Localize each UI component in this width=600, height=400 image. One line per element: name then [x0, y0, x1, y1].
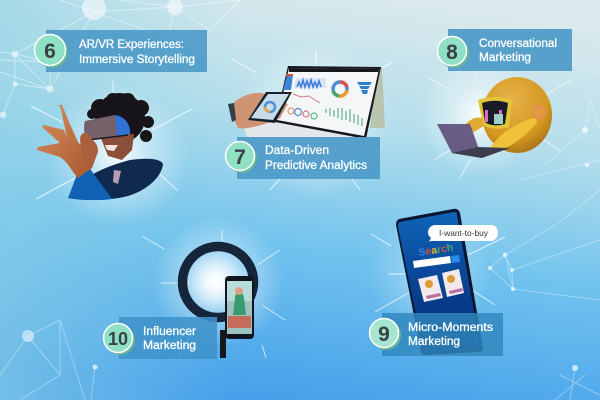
number badge 6: [34, 34, 68, 68]
item 9 label: Marketing: [408, 336, 460, 348]
item 7 label: Predictive Analytics: [265, 160, 367, 172]
face: [100, 134, 134, 160]
number badge 9: 9: [378, 323, 390, 346]
item 10 label: Marketing: [143, 340, 196, 352]
hair: [87, 93, 154, 143]
item 8 illustration: robot with laptop: [418, 53, 571, 178]
item 10 label: Influencer: [143, 326, 196, 338]
number badge 7: [226, 142, 257, 173]
item 6 label: AR/VR Experiences:: [79, 39, 184, 51]
item 10 illustration: ring light with phone: [142, 216, 285, 358]
item 8 label: Conversational: [479, 38, 557, 50]
hinge and keyboard: [370, 67, 385, 128]
screen: [275, 66, 381, 139]
speech bubble: I-want-to-buy: [439, 228, 489, 238]
network decoration: top: [0, 0, 600, 125]
item 8 label: [438, 29, 572, 71]
hand holding phone: [232, 93, 288, 128]
number badge 7: 7: [234, 146, 246, 169]
item 8 label: Marketing: [479, 52, 531, 64]
item 6 label: Immersive Storytelling: [79, 54, 195, 66]
item 6 label: [34, 30, 207, 72]
donut chart: [333, 82, 347, 96]
product cards: [418, 275, 443, 302]
body: [68, 159, 163, 200]
headset: [84, 115, 117, 140]
search word: Search: [418, 242, 454, 259]
item 10 label: [104, 317, 217, 359]
item 9 label: Micro-Moments: [408, 322, 493, 334]
item 7 label: [226, 137, 380, 179]
network decoration: right and bottom: [0, 100, 600, 400]
hand: [37, 105, 92, 178]
number badge 6: 6: [44, 40, 56, 63]
item 9 illustration: phone with search screen: [368, 209, 505, 355]
item 7 illustration: laptop and phone dashboards: [228, 42, 393, 198]
item 9 label: [370, 313, 503, 356]
number badge 10: 10: [108, 329, 128, 349]
item 7 label: Data-Driven: [265, 145, 329, 157]
number badge 8: 8: [446, 41, 458, 64]
item 6 illustration: person in VR headset: [31, 81, 192, 227]
search bar: [413, 256, 451, 268]
speech bubble: [428, 225, 498, 242]
